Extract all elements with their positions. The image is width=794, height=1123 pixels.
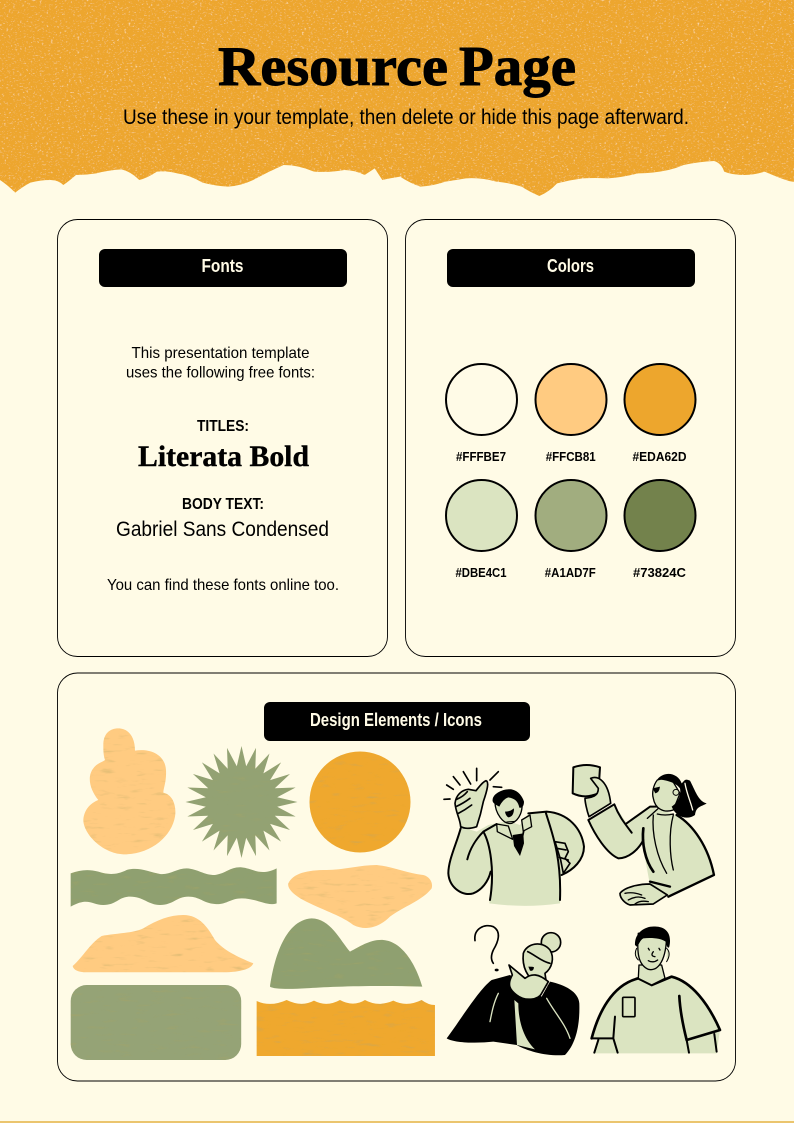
icon: man in polo shirt [592,926,720,1053]
icon: woman raising a cup [573,765,714,905]
bottom orange edge [0,1121,794,1123]
fonts intro text: This presentation template [132,345,310,362]
body text label: BODY TEXT: [182,496,264,513]
title font name: Literata Bold [138,440,309,473]
panel: fonts [58,220,388,656]
fonts footnote: You can find these fonts online too. [107,577,339,594]
title: Page [459,36,576,98]
design elements heading pill: Design Elements / Icons [310,710,482,730]
shape: green mountains [270,918,422,989]
swatch FFFBE7: #FFFBE7 [456,450,506,464]
shape: green starburst [186,746,298,858]
swatch 73824C [624,480,696,580]
body font name: Gabriel Sans Condensed [116,518,329,541]
fonts heading pill [99,249,347,287]
shape: peach hill [73,915,253,972]
colors heading pill: Colors [547,256,594,276]
swatch A1AD7F [536,480,606,580]
shape: green rounded rectangle [71,985,241,1060]
titles label: TITLES: [197,418,249,435]
fonts intro text [126,345,315,382]
icon: thinking woman with question mark [447,926,579,1055]
subtitle: Use these in your template, then delete or hide this page afterward. [123,106,689,129]
design elements heading pill [264,702,530,741]
fonts heading pill: Fonts [202,256,244,276]
swatch FFCB81 [536,364,606,464]
swatch 73824C: #73824C [633,566,686,580]
title [218,36,576,98]
fonts intro text: uses the following free fonts: [126,364,315,382]
swatch EDA62D: #EDA62D [632,450,686,464]
swatch DBE4C1 [446,480,517,580]
swatch A1AD7F: #A1AD7F [545,566,596,580]
colors heading pill [447,249,695,287]
title: Resource [218,36,448,98]
swatch EDA62D [624,364,696,464]
shape: peach cloud blob [83,728,175,854]
swatch FFFBE7 [446,364,517,464]
swatch FFCB81: #FFCB81 [546,450,596,464]
icon: man giving thumbs up [444,768,584,906]
shape: orange circle [310,752,410,852]
shape: peach organic blob [288,865,432,928]
panel: colors [406,220,736,656]
panel: design elements [58,673,736,1081]
swatch DBE4C1: #DBE4C1 [456,566,507,580]
shape: orange scalloped band [257,1000,435,1056]
shape: green wave band [71,867,277,907]
torn orange header band [0,0,794,196]
